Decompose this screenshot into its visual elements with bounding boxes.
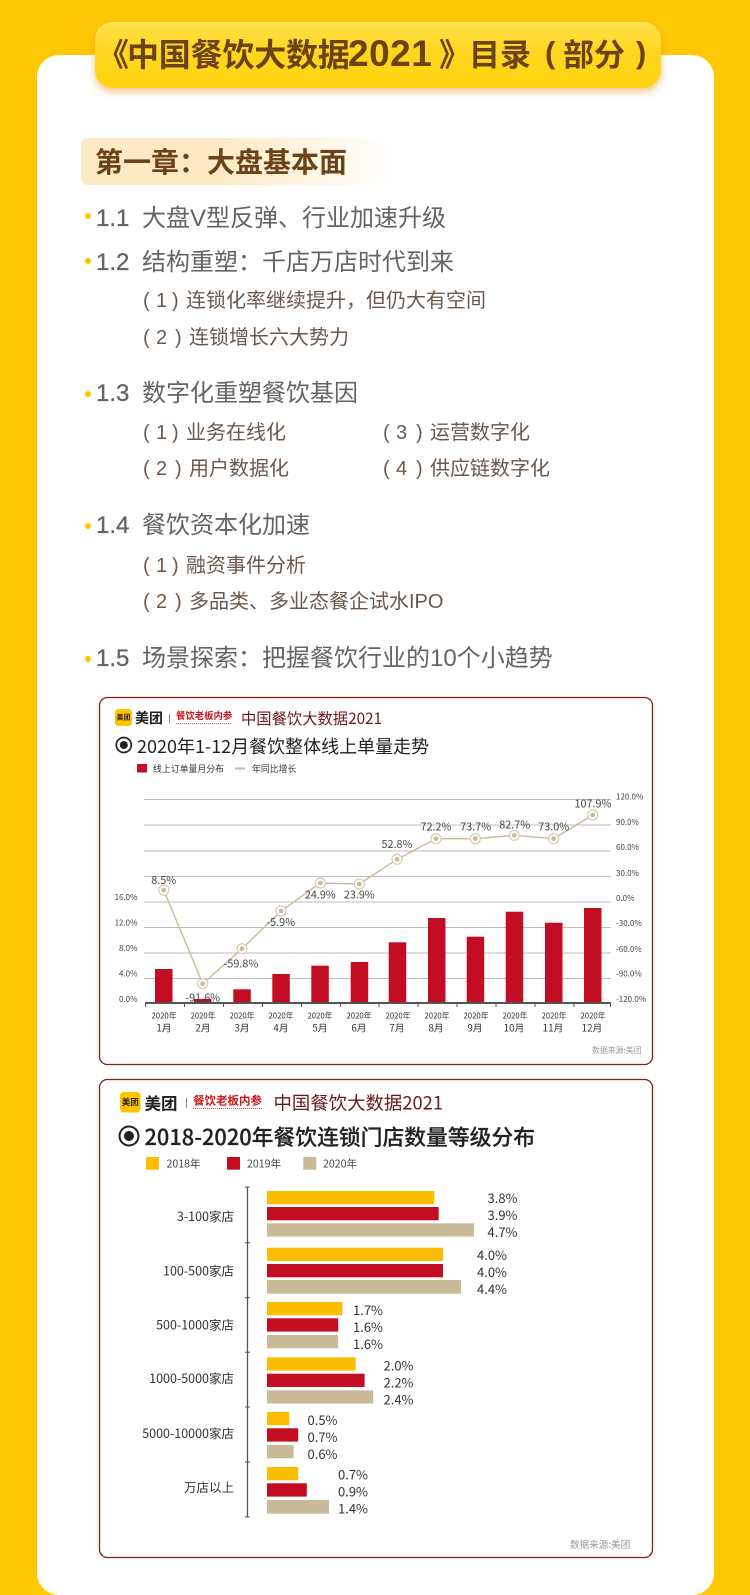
line value labels: -59.8% [224,955,258,971]
line value labels: 52.8% [382,836,413,852]
sub item 1.2 (1): 1 [156,290,167,312]
item 1.4: 餐饮资本化加速 [142,512,310,539]
x axis labels: 2020年 [346,1010,372,1022]
chapter heading: 第一章：大盘基本面 [95,141,347,181]
bullet 1.5 [85,656,91,662]
right axis labels: 30.0% [616,868,640,879]
x axis labels: 5月 [312,1021,328,1035]
line value labels: 73.7% [460,819,491,835]
sub item 1.4 (1): 融资事件分析 [186,554,306,576]
item 1.1: 大盘V型反弹、行业加速升级 [142,205,446,232]
left axis labels: 12.0% [115,918,138,928]
item 1.3: 1.3 [96,380,129,407]
line value labels: 82.7% [499,816,530,832]
x axis [145,1003,611,1007]
category labels: 3-100家店 [177,1206,234,1225]
sub item 1.2 (2): 连锁增长六大势力 [189,326,349,348]
item 1.4: 1.4 [96,512,129,539]
sub item 1.4 (1): 1 [156,554,167,576]
title banner: 部分 [563,30,625,75]
sub item 1.3 (3): ) [416,422,423,444]
category labels [142,1206,234,1496]
title banner: 《 [97,30,129,76]
sub item 1.4 (1): ) [172,554,179,576]
legend: 2018年 [166,1156,201,1172]
panel: monthly online orders chart [98,696,654,1066]
sub item 1.3 (3) [383,422,530,444]
line value labels: -5.9% [266,914,295,930]
line value labels: 23.9% [344,887,375,903]
bar value labels: 3.9% [488,1205,518,1224]
category axis [245,1187,250,1517]
bar value labels: 3.8% [488,1188,518,1207]
line value labels: 72.2% [421,819,452,835]
icon: Meituan logo: 美团 [116,712,130,722]
sub item 1.4 (2): ( [143,590,150,612]
right axis labels: -120.0% [616,994,647,1005]
bar value labels: 2.2% [384,1372,414,1392]
item 1.5: 1.5 [96,645,129,672]
sub item 1.3 (2): 2 [156,458,167,480]
right axis labels [616,792,647,1005]
x axis labels: 4月 [273,1021,289,1035]
sub item 1.3 (3): ( [383,422,390,444]
bullet 1.2 [85,258,91,264]
bar value labels: 1.7% [353,1300,383,1319]
bar value labels: 4.7% [488,1222,518,1241]
left axis labels [115,892,138,1005]
right axis labels: -30.0% [616,918,642,929]
x axis labels: 12月 [582,1021,602,1035]
icon: Meituan logo [120,1090,178,1114]
category labels: 5000-10000家店 [142,1423,234,1442]
sub item 1.2 (1): ( [143,290,150,312]
right axis labels: 90.0% [616,817,640,828]
sub item 1.3 (1): ( [143,422,150,444]
right axis labels: 60.0% [616,842,640,853]
x axis labels: 11月 [543,1021,563,1035]
title banner: 中国餐饮大数据 [127,30,350,76]
sub item 1.3 (4): 供应链数字化 [430,458,550,480]
category labels: 万店以上 [184,1477,234,1496]
report name: 中国餐饮大数据2021 [241,707,382,729]
x axis labels: 2020年 [385,1010,411,1022]
chart title: 2018-2020年餐饮连锁门店数量等级分布 [144,1121,535,1152]
left axis labels: 0.0% [119,994,138,1005]
sub item 1.4 (1): ( [143,554,150,576]
bars: 2018 [267,1191,443,1480]
x axis labels: 2月 [195,1021,211,1035]
bars: 2020 [267,1223,474,1514]
title banner: 2021 [348,33,432,74]
sub item 1.4 (2): ) [175,590,182,612]
category labels: 1000-5000家店 [149,1368,234,1387]
item 1.2: 结构重塑：千店万店时代到来 [142,249,454,276]
item 1.3: 数字化重塑餐饮基因 [142,380,358,407]
bars: 2019 [267,1207,443,1497]
chapter heading [81,138,391,185]
sub item 1.3 (2): 用户数据化 [189,458,289,480]
legend: 2020年 [323,1156,358,1172]
sub item 1.3 (2): ( [143,458,150,480]
x axis labels: 2020年 [424,1010,450,1022]
bar value labels: 0.6% [308,1444,338,1463]
x axis labels: 10月 [504,1021,524,1035]
icon: Meituan logo: 美团 [135,708,163,728]
left axis labels: 8.0% [119,943,138,954]
sub item 1.2 (2): 2 [156,326,167,348]
line value labels: 8.5% [151,872,176,888]
sub item 1.3 (4): 4 [396,458,407,480]
sub item 1.3 (4): ( [383,458,390,480]
x axis labels: 3月 [234,1021,250,1035]
sub item 1.3 (3): 3 [396,422,407,444]
item 1.1: 1.1 [96,205,129,232]
bar value labels: 0.7% [338,1464,368,1484]
line value labels: 24.9% [305,887,336,903]
brand: 餐饮老板内参: 餐饮老板内参 [176,708,233,722]
brand: 餐饮老板内参: 餐饮老板内参 [193,1092,262,1108]
sub item 1.2 (2): ) [175,326,182,348]
sub item 1.2 (2): ( [143,326,150,348]
x axis labels [151,1010,606,1035]
report name: 中国餐饮大数据2021 [274,1090,443,1116]
left axis labels: 4.0% [119,968,138,980]
data source: 数据来源:美团 [592,1045,642,1056]
right axis labels: 0.0% [616,893,635,904]
sub item 1.2 (1): 连锁化率继续提升，但仍大有空间 [186,290,486,312]
x axis labels: 2020年 [580,1010,606,1022]
sub item 1.4 (2): 2 [156,590,167,612]
category labels: 100-500家店 [163,1260,234,1280]
bar value labels: 4.0% [477,1262,507,1281]
legend [146,1156,358,1172]
line value labels [151,795,612,1005]
x axis labels: 7月 [389,1021,405,1035]
title banner: 目录 [469,30,531,75]
sub item 1.3 (3): 运营数字化 [430,422,530,444]
sub item 1.3 (2): ) [175,458,182,480]
x axis labels: 2020年 [463,1010,489,1022]
x axis labels: 2020年 [268,1010,294,1022]
line value labels: -91.6% [185,989,220,1005]
bar value labels: 4.4% [477,1279,507,1298]
bar value labels [308,1188,518,1518]
x axis labels: 2020年 [190,1010,216,1022]
bar value labels: 4.0% [477,1245,507,1264]
icon: Meituan logo [115,708,163,728]
bullet 1.3 [85,391,91,397]
x axis labels: 8月 [428,1021,444,1035]
data source: 数据来源:美团 [570,1537,630,1551]
sub item 1.3 (4): ) [416,458,423,480]
x axis labels: 2020年 [151,1010,177,1022]
right axis labels: 120.0% [616,792,644,802]
x axis labels: 2020年 [541,1010,567,1022]
line value labels: 107.9% [575,795,612,811]
bar value labels: 1.6% [353,1334,383,1353]
title banner: 》 [439,30,471,76]
title banner [95,22,661,88]
bar value labels: 0.7% [308,1427,338,1446]
bar value labels: 1.4% [338,1498,368,1518]
x axis labels: 6月 [351,1021,367,1035]
line chart: year-over-year growth [159,810,598,989]
sub item 1.4 (2): 多品类、多业态餐企试水IPO [189,590,443,612]
title banner: ) [636,35,646,70]
line value labels: 73.0% [538,819,569,835]
sub item 1.3 (2) [143,458,289,480]
sub item 1.3 (1): ) [172,422,179,444]
category labels: 500-1000家店 [156,1314,234,1334]
bullet 1.1 [85,213,91,219]
item 1.2: 1.2 [96,249,129,276]
icon: Meituan logo: 美团 [144,1090,178,1114]
sub item 1.3 (1) [143,422,286,444]
x axis labels: 1月 [156,1021,172,1035]
panel: chain store tier distribution chart [98,1078,654,1558]
bar value labels: 2.0% [384,1356,414,1374]
legend: 2019年 [247,1156,282,1172]
right axis labels: -90.0% [616,968,642,980]
sub item 1.2 (1): ) [172,290,179,312]
legend [137,762,296,775]
x axis labels: 9月 [467,1021,483,1035]
sub item 1.3 (1): 业务在线化 [186,422,286,444]
x axis labels: 2020年 [229,1010,255,1022]
bar chart: monthly orders [155,908,602,1003]
bar value labels: 2.4% [384,1390,414,1408]
bar value labels: 1.6% [353,1317,383,1336]
icon: Meituan logo: 美团 [122,1096,139,1108]
bar value labels: 0.9% [338,1482,368,1500]
right axis labels: -60.0% [616,944,642,955]
bar value labels: 0.5% [308,1410,338,1429]
x axis labels: 2020年 [502,1010,528,1022]
bullet 1.4 [85,523,91,529]
item 1.5: 场景探索：把握餐饮行业的10个小趋势 [142,645,553,672]
title banner: ( [545,35,555,70]
legend: 年同比增长 [252,762,296,775]
left axis labels: 16.0% [115,892,138,903]
chart title: 2020年1-12月餐饮整体线上单量走势 [137,733,429,759]
legend: 线上订单量月分布 [153,762,224,775]
sub item 1.3 (1): 1 [156,422,167,444]
x axis labels: 2020年 [307,1010,333,1022]
